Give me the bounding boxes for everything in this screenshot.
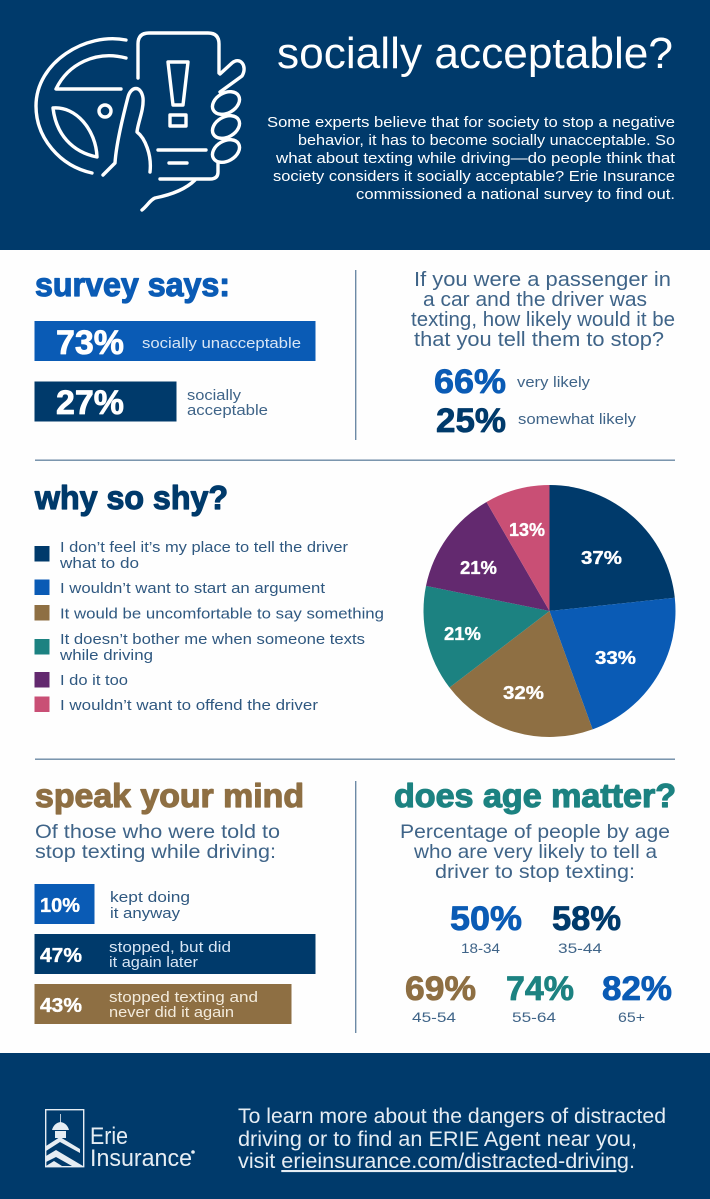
bar: 73% socially unacceptable [34,321,316,362]
bar: 10% kept doing it anyway [34,884,190,924]
subheading: who are very likely to tell a [413,841,657,863]
legend: while driving [59,647,153,664]
stat: 55-64: 55-64 [512,1009,556,1025]
stat: 18-34: 18-34 [461,940,500,956]
stat: 65+ [602,970,672,1025]
stat: 25% somewhat likely: somewhat likely [518,411,637,428]
subheading: Percentage of people by age [400,821,670,843]
panel: why so shy [34,479,675,737]
bar: 73% socially unacceptable: 73% [56,324,124,362]
stat: 35-44: 58% [552,900,621,938]
heading: why so shy: why so shy? [34,479,228,516]
stat: 66% very likely: 66% [434,363,506,401]
question text [411,269,675,351]
call to action text [238,1105,666,1173]
call to action text: To learn more about the dangers of distracted [238,1105,666,1128]
pie chart: 13% [509,519,545,540]
bar: 47% stopped but did it again later [34,934,316,974]
panel: does age matter [394,777,676,1025]
bar: 10% kept doing it anyway: kept doing [110,889,190,906]
stat: 35-44: 35-44 [558,940,602,956]
stat: 18-34 [450,900,522,956]
intro paragraph: Some experts believe that for society to stop a negative [267,114,675,131]
bar: 47% stopped but did it again later: it again later [109,954,198,971]
stat: 25% somewhat likely: 25% [436,402,506,440]
bar: 43% stopped texting and never did it again: never did it again [109,1004,234,1021]
icon: steering wheel and hand holding phone with alert [36,33,244,210]
stat: 65+: 65+ [618,1009,645,1025]
pie chart [424,485,675,737]
legend: I don’t feel it’s my place to tell the driver [60,539,348,556]
pie chart: 33% [595,647,636,668]
stat: 45-54: 69% [405,970,476,1008]
subheading: driver to stop texting: [435,861,635,883]
stat: 45-54 [405,970,476,1025]
stat: 55-64 [506,970,574,1025]
bar: 27% socially acceptable: 27% [56,384,124,422]
legend [34,539,384,714]
pie chart: 21% [460,557,497,578]
question text: that you tell them to stop? [414,329,664,351]
intro paragraph: commissioned a national survey to find out. [356,186,675,203]
stat: 18-34: 50% [450,900,522,938]
legend: I do it too [60,672,128,689]
intro paragraph: behavior, it has to become socially unacceptable. So [298,132,675,149]
intro paragraph: what about texting while driving—do people think that [275,150,676,167]
panel: passenger question [411,269,675,440]
bar: 43% stopped texting and never did it again: 43% [40,995,82,1017]
stat: 66% very likely: very likely [517,374,591,391]
panel: speak your mind [34,777,316,1024]
logo: Erie Insurance: Erie [90,1123,128,1150]
pie chart: 21% [444,623,481,644]
bar: 10% kept doing it anyway: 10% [40,895,80,917]
footer panel [0,1053,710,1199]
stat: 25% somewhat likely [436,402,637,440]
logo: Erie Insurance [46,1110,195,1172]
bar: 47% stopped but did it again later: 47% [40,945,82,967]
question text: a car and the driver was [423,289,647,311]
title: socially acceptable? [277,29,673,78]
heading: speak your mind: speak your mind [35,777,304,814]
header panel [0,0,710,250]
pie chart: 32% [503,682,544,703]
bar: 27% socially acceptable: socially [187,387,242,404]
bar: 10% kept doing it anyway: it anyway [110,905,181,922]
call to action text: visit erieinsurance.com/distracted-driving . [238,1150,635,1173]
question text: If you were a passenger in [414,269,671,291]
pie chart: 37% [581,547,622,568]
intro paragraph: society considers it socially acceptable? Erie Insurance [273,168,675,185]
bar: 47% stopped but did it again later: stopped, but did [109,939,231,956]
bar: 27% socially acceptable: acceptable [187,402,268,419]
legend: I wouldn’t want to start an argument [60,580,326,597]
question text: texting, how likely would it be [411,309,675,331]
stat: 35-44 [552,900,621,956]
stat: 65+: 82% [602,970,672,1008]
stat: 55-64: 74% [506,970,574,1008]
stat: 66% very likely [434,363,591,401]
heading: survey says: survey says: [35,266,230,303]
stat: 45-54: 45-54 [412,1009,456,1025]
subheading [400,821,670,883]
bar: 43% stopped texting and never did it again [34,984,292,1024]
bar: 43% stopped texting and never did it again: stopped texting and [109,989,258,1006]
subheading [35,821,280,863]
panel: survey says [34,266,316,422]
legend: It doesn’t bother me when someone texts [60,631,365,648]
heading: does age matter: does age matter? [394,777,676,814]
legend: what to do [59,555,139,572]
subheading: Of those who were told to [35,821,280,843]
legend: It would be uncomfortable to say something [60,606,384,622]
bar: 73% socially unacceptable: socially unacceptable [142,335,301,352]
bar: 27% socially acceptable [34,382,268,422]
subheading: stop texting while driving: [35,841,276,863]
call to action text: driving or to find an ERIE Agent near you, [238,1128,637,1151]
logo: Erie Insurance: Insurance [90,1145,192,1172]
legend: I wouldn’t want to offend the driver [60,697,318,714]
intro paragraph [267,114,676,203]
